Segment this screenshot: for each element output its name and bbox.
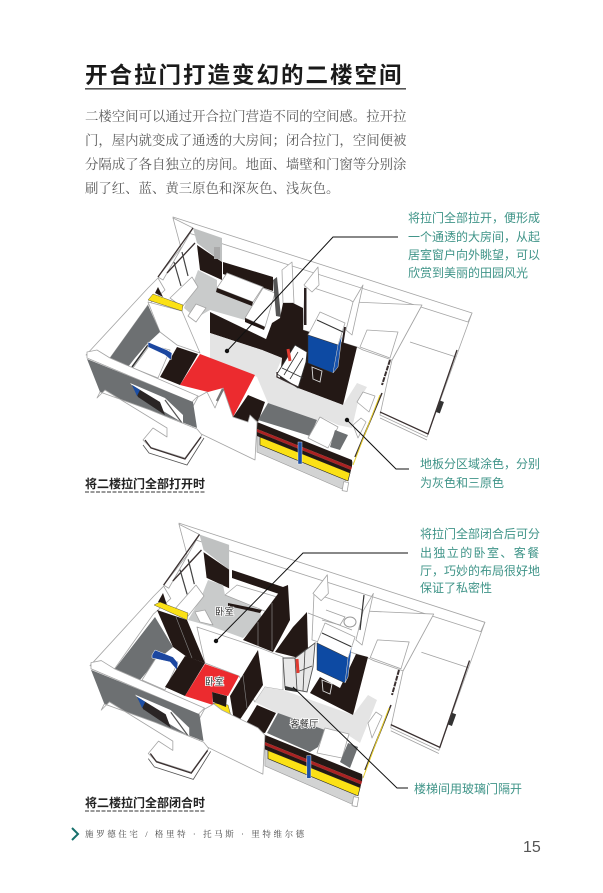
room label: dining room: 客餐厅 — [290, 718, 319, 730]
intro text block: 刷了红、蓝、黄三原色和深灰色、浅灰色。 — [85, 180, 339, 196]
left outer wall — [86, 218, 193, 358]
yellow strip — [148, 294, 183, 311]
staircase — [277, 345, 322, 388]
grey floor front — [267, 713, 325, 752]
callout: closed sliding doors: 出独立的卧室、客餐 — [420, 545, 541, 560]
rear dark wall strip — [223, 262, 273, 291]
callout: floor colours: 地板分区域涂色，分别 — [420, 456, 540, 471]
callout: closed sliding doors: 将拉门全部闭合后可分 — [420, 526, 540, 541]
dark triangle — [155, 287, 163, 297]
intro text block: 二楼空间可以通过开合拉门营造不同的空间感。拉开拉 — [85, 108, 407, 124]
white bed — [133, 345, 170, 378]
sofa and bed — [170, 273, 275, 330]
sofa room floor — [184, 270, 253, 320]
footer running title: 施罗德住宅 / 格里特 · 托马斯 · 里特维尔德 — [85, 829, 307, 839]
grey floor front — [258, 403, 317, 436]
dark door right — [230, 650, 263, 727]
illustration: second floor with sliding doors open — [86, 217, 472, 491]
leader line: glass door — [293, 687, 408, 788]
red floor — [180, 354, 255, 417]
intro text block — [85, 108, 407, 196]
front shell — [91, 661, 363, 807]
dark floor left — [165, 656, 205, 696]
balcony — [97, 390, 204, 465]
callout: floor colours — [420, 456, 540, 490]
light grey floor — [255, 687, 377, 743]
door jamb front — [217, 389, 223, 401]
dark floor right — [262, 303, 357, 405]
intro text block: 门，屋内就变成了通透的大房间；闭合拉门，空间便被 — [85, 132, 407, 149]
bed and sofa — [174, 585, 277, 625]
window wall — [158, 228, 222, 286]
blue shelf — [152, 650, 178, 670]
callout: closed sliding doors: 厅，巧妙的布局很好地 — [420, 563, 540, 578]
callout: open sliding doors: 居室窗户向外眺望，可以 — [408, 247, 540, 262]
dark floor behind sofa — [210, 312, 268, 350]
dark closed door left — [157, 610, 205, 663]
leader line: floor colours — [345, 418, 409, 469]
illustration: second floor with sliding doors closed — [90, 523, 485, 807]
closed dark doors rear — [243, 585, 308, 660]
blue box — [308, 312, 345, 373]
grey bedroom wall — [110, 305, 160, 367]
dark triangle — [158, 593, 167, 605]
caption: doors open: 将二楼拉门全部打开时 — [85, 476, 205, 491]
toilet outline — [308, 595, 364, 630]
central white wall — [197, 627, 283, 702]
right terrace — [380, 305, 472, 440]
dark floor left — [160, 347, 198, 385]
callout: floor colours: 为灰色和三原色 — [420, 476, 504, 490]
dark door small — [212, 692, 227, 707]
callout: open sliding doors: 将拉门全部拉开，便形成 — [408, 210, 540, 225]
dark floor front — [242, 705, 276, 733]
red floor — [185, 664, 239, 705]
front grey wall — [87, 350, 198, 428]
white bed — [142, 655, 178, 690]
small right room — [317, 670, 399, 778]
yellow door — [213, 703, 234, 727]
caption: doors closed: 将二楼拉门全部闭合时 — [85, 795, 205, 810]
title: 开合拉门打造变幻的二楼空间 — [85, 62, 404, 88]
intro text block: 分隔成了各自独立的房间。地面、墙壁和门窗等分别涂 — [85, 156, 407, 172]
callout: glass door: 楼梯间用玻璃门隔开 — [414, 781, 522, 796]
leader line: open rooms — [225, 237, 398, 353]
room label: bedroom lower: 卧室 — [205, 676, 224, 688]
sofa room floor — [188, 580, 262, 638]
blue shelf — [148, 342, 172, 360]
rear shell — [90, 523, 485, 754]
blue box — [317, 623, 355, 683]
dark floors front — [215, 390, 265, 422]
white wall panel — [148, 302, 200, 353]
page number: 15 — [523, 839, 541, 856]
callout: open sliding doors — [408, 210, 540, 280]
leader line: separate rooms — [214, 553, 408, 643]
footer chevron icon — [72, 828, 78, 840]
glass door stairwell — [283, 643, 332, 694]
small right room — [308, 360, 390, 465]
light grey floor — [210, 333, 367, 428]
yellow strip — [154, 602, 188, 620]
room label: bedroom upper: 卧室 — [215, 606, 234, 618]
right room walls — [282, 262, 422, 360]
rear outer wall — [173, 217, 472, 322]
callout: closed sliding doors: 保证了私密性 — [420, 580, 492, 595]
rear dark strip — [232, 570, 283, 595]
grey bedroom wall — [114, 617, 173, 680]
front wall stripes — [257, 422, 353, 491]
callout: open sliding doors: 欣赏到美丽的田园风光 — [408, 265, 528, 280]
door jamb — [273, 277, 281, 317]
callout: closed sliding doors — [420, 526, 541, 595]
right dark floors — [310, 654, 368, 715]
callout: open sliding doors: 一个通透的大房间，从起 — [408, 229, 540, 244]
front white wall — [192, 388, 257, 460]
